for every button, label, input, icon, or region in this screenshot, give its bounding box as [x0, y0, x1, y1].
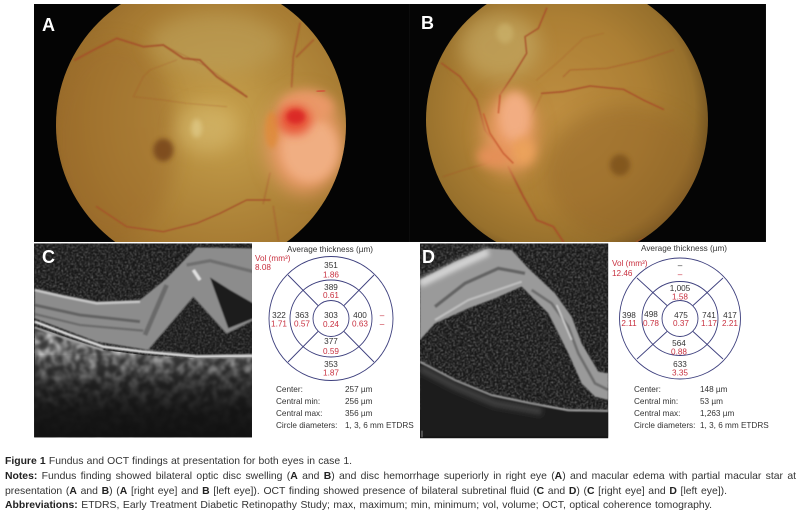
volume label D: 12.46 — [612, 269, 633, 278]
ETDRS thickness map C: 377 — [324, 337, 338, 346]
ETDRS thickness map C: 1.86 — [323, 270, 339, 280]
OCT measurements C: Central min: — [276, 397, 320, 406]
OCT measurements C: 256 µm — [345, 397, 373, 406]
panel D: left eye OCT scan — [420, 243, 608, 438]
ETDRS thickness map C — [269, 256, 393, 380]
ETDRS thickness map D: 1,005 — [670, 284, 691, 293]
ETDRS thickness map C: – — [380, 311, 385, 320]
ETDRS thickness map C: 0.59 — [323, 347, 339, 356]
notes text line 1: Notes: Fundus finding showed bilateral optic disc swelling (A and B) and disc hemorrhage superiorly in right eye (A) and macular edema with partial macular star at — [5, 471, 796, 482]
ETDRS thickness map C: 1.71 — [271, 320, 287, 328]
ETDRS thickness map D: 1.17 — [701, 319, 717, 328]
volume label C — [255, 254, 291, 272]
ETDRS thickness map C: 351 — [324, 261, 338, 270]
ETDRS thickness map C: 0.61 — [323, 291, 339, 300]
ETDRS thickness map D: 741 — [702, 311, 716, 320]
ETDRS thickness map C: 322 — [272, 311, 286, 320]
panel C: right eye OCT scan — [34, 243, 254, 442]
panel letter B: B — [421, 13, 434, 33]
panel B: left eye fundus photo — [410, 0, 766, 261]
panel letter C: C — [42, 247, 55, 267]
OCT measurements D: 53 µm — [700, 397, 723, 406]
panel A: right eye fundus photo — [34, 0, 410, 270]
volume label C: 8.08 — [255, 263, 271, 272]
ETDRS thickness map D: 498 — [644, 310, 658, 319]
ETDRS thickness map D: 0.37 — [673, 319, 689, 328]
ETDRS thickness map D: 417 — [723, 311, 737, 320]
OCT measurements D: Circle diameters: — [634, 421, 695, 430]
ETDRS thickness map C: – — [380, 320, 385, 328]
ETDRS thickness map D: 564 — [672, 339, 686, 348]
OCT measurements D: 148 µm — [700, 385, 728, 394]
ETDRS thickness map C: 389 — [324, 283, 338, 292]
panel letter A: A — [42, 15, 55, 35]
OCT measurements C: 257 µm — [345, 385, 373, 394]
volume label C: Vol (mm³) — [255, 254, 291, 263]
figure caption title: Figure 1 Fundus and OCT findings at presentation for both eyes in case 1. — [5, 456, 352, 467]
ETDRS thickness map D: 2.21 — [722, 319, 738, 328]
ETDRS thickness map D: 0.78 — [643, 319, 659, 328]
OCT measurements C: Central max: — [276, 409, 322, 418]
OCT measurements C: 356 µm — [345, 409, 373, 418]
ETDRS thickness map D: 2.11 — [621, 319, 637, 328]
OCT measurements C: Center: — [276, 385, 303, 394]
OCT measurements D: 1,263 µm — [700, 409, 734, 418]
OCT measurements D: Central min: — [634, 397, 678, 406]
notes text line 2: presentation (A and B) (A [right eye] and B [left eye]). OCT finding showed presence of bilateral subretinal fluid (C and D) (C [right eye] and D [left eye]). — [5, 486, 727, 497]
ETDRS thickness map D: 3.35 — [672, 368, 688, 378]
ETDRS thickness map C: 400 — [353, 311, 367, 320]
volume label D — [612, 259, 648, 278]
OCT measurements D: 1, 3, 6 mm ETDRS — [700, 421, 769, 430]
abbreviations text: Abbreviations: ETDRS, Early Treatment Diabetic Retinopathy Study; max, maximum; min, minimum; vol, volume; OCT, optical coherence tomography. — [5, 500, 712, 511]
thickness chart C heading: Average thickness (µm) — [287, 245, 373, 254]
ETDRS thickness map C: 363 — [295, 311, 309, 320]
OCT measurements C: 1, 3, 6 mm ETDRS — [345, 421, 414, 430]
ETDRS thickness map D: 0.88 — [671, 348, 687, 356]
OCT measurements C: Circle diameters: — [276, 421, 337, 430]
thickness chart D heading: Average thickness (µm) — [641, 244, 727, 253]
ETDRS thickness map D: – — [678, 270, 683, 279]
ETDRS thickness map C: 1.87 — [323, 368, 339, 378]
panel letter D: D — [422, 247, 435, 267]
volume label D: Vol (mm³) — [612, 259, 648, 268]
OCT measurements D — [634, 385, 769, 430]
ETDRS thickness map C: 353 — [324, 360, 338, 369]
OCT measurements C — [276, 385, 414, 430]
ETDRS thickness map C: 303 — [324, 311, 338, 320]
ETDRS thickness map D: 398 — [622, 311, 636, 320]
ETDRS thickness map C: 0.63 — [352, 320, 368, 328]
ETDRS thickness map C: 0.57 — [294, 320, 310, 328]
OCT measurements D: Central max: — [634, 409, 680, 418]
ETDRS thickness map D: – — [678, 261, 683, 270]
ETDRS thickness map C: 0.24 — [323, 320, 339, 329]
OCT measurements D: Center: — [634, 385, 661, 394]
ETDRS thickness map D: 1.58 — [672, 292, 688, 302]
ETDRS thickness map D — [620, 258, 740, 379]
ETDRS thickness map D: 633 — [673, 360, 687, 369]
ETDRS thickness map D: 475 — [674, 311, 688, 320]
